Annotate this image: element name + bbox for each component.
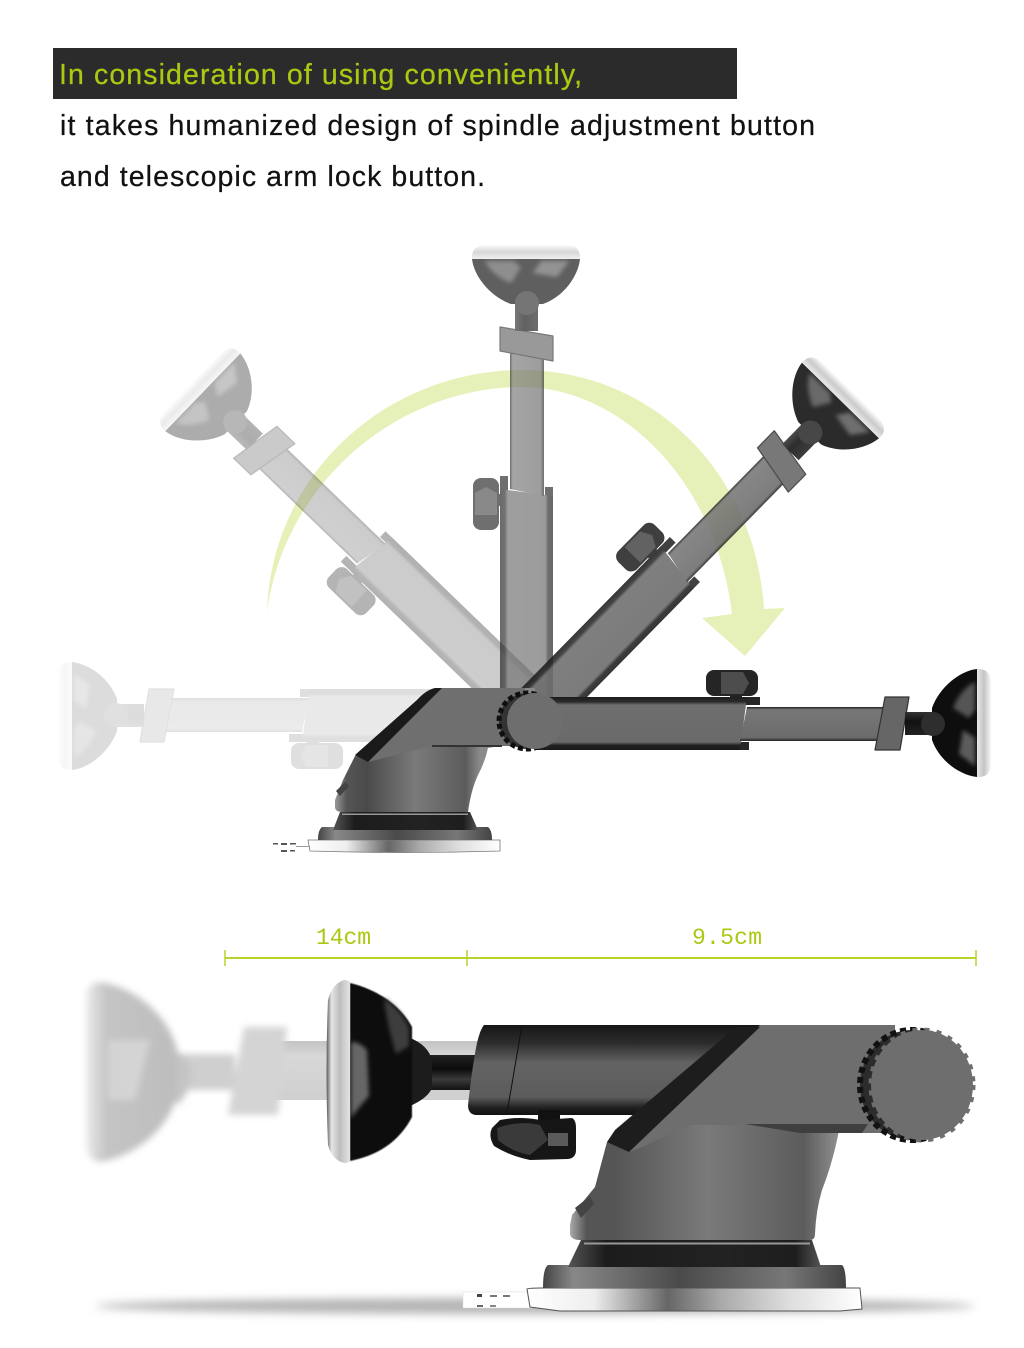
ghost extended arm (86, 982, 482, 1162)
head (629, 1025, 895, 1152)
body text: it takes humanized design of spindle adjustment button (60, 110, 815, 142)
small side button (575, 1196, 594, 1218)
small side button (336, 782, 349, 796)
cup rim (326, 980, 350, 1163)
lock knob (490, 1110, 576, 1160)
lower body (570, 1120, 841, 1240)
label: 9.5cm: 9.5cm (692, 925, 762, 951)
body text: and telescopic arm lock button. (60, 161, 485, 193)
heading bar with lead sentence: In consideration of using conveniently, (59, 59, 582, 91)
base neck (568, 1240, 821, 1267)
ghost arm: upper right (492, 353, 889, 754)
diagonal strip (607, 1027, 760, 1152)
base neck (333, 812, 478, 830)
diagonal strip (355, 688, 442, 762)
neck (430, 1055, 478, 1090)
body text (60, 110, 815, 193)
ghost arm: upper left (155, 344, 558, 738)
arrow: rotation arc (267, 370, 785, 656)
spindle knob (860, 1030, 973, 1140)
suction plate (527, 1288, 862, 1311)
dimension line (225, 950, 976, 966)
arm block (468, 1025, 770, 1115)
tab (463, 1292, 533, 1308)
cup dome (350, 983, 412, 1161)
mount: rotating view (273, 669, 991, 852)
pivot knob (499, 693, 563, 749)
ghost arm: vertical (472, 245, 580, 701)
body (335, 688, 535, 812)
shadow (95, 1298, 975, 1314)
label: 14cm: 14cm (316, 925, 371, 951)
heading bar with lead sentence (53, 48, 737, 99)
suction disk (318, 827, 492, 840)
ghost arm: horizontal left (58, 662, 514, 770)
tab (273, 843, 310, 852)
suction plate (308, 840, 500, 852)
arm: horizontal solid (535, 669, 991, 777)
suction disk (543, 1265, 846, 1288)
ball (410, 1038, 432, 1106)
mount: extended view (326, 980, 973, 1311)
